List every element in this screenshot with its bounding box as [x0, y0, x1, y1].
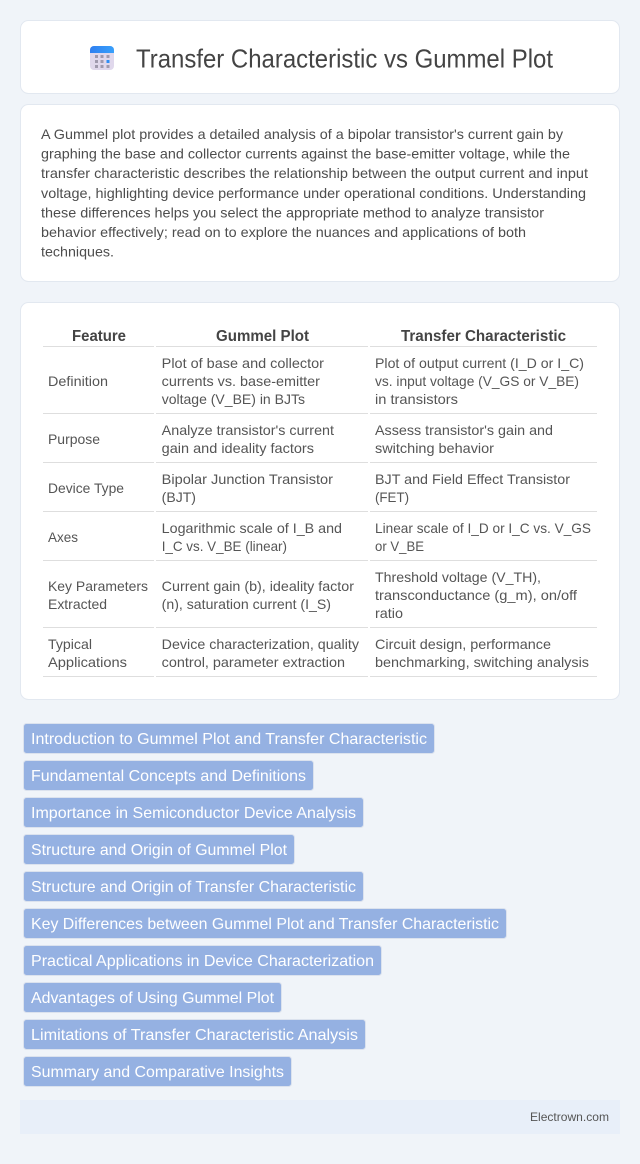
table row: key parameters extracted: Key Parameters: [48, 578, 148, 594]
table row: purpose: Analyze transistor's current: [162, 422, 334, 438]
table row: axes: [48, 520, 591, 554]
table row: typical applications: Applications: [48, 654, 127, 670]
table row: axes: Logarithmic scale of I_B and: [162, 520, 342, 536]
table row: definition: voltage (V_BE) in BJTs: [162, 391, 305, 407]
pill: limitations: Limitations of Transfer Characteristic Analysis: [31, 1027, 358, 1044]
table row: key parameters extracted: Extracted: [48, 596, 107, 612]
table row: axes: or V_BE: [375, 538, 424, 554]
table row: purpose: gain and ideality factors: [162, 440, 314, 456]
table row: purpose: [48, 422, 553, 456]
pill: introduction: Introduction to Gummel Plot and Transfer Characteristic: [31, 731, 427, 748]
table row: typical applications: Typical: [48, 636, 92, 652]
panel: title header: [20, 20, 620, 94]
text block: intro paragraph: these differences helps you select the appropriate method to analyze transistor: [41, 204, 544, 220]
pill: limitations: [24, 1020, 366, 1050]
pill: fundamental concepts: Fundamental Concepts and Definitions: [31, 768, 306, 785]
panel: comparison table: [20, 302, 620, 700]
table row: device type: [48, 471, 570, 505]
pill: practical applications: Practical Applications in Device Characterization: [31, 953, 374, 970]
pill: transfer structure: Structure and Origin of Transfer Characteristic: [31, 879, 356, 896]
pill: key differences: Key Differences between Gummel Plot and Transfer Characteristic: [31, 916, 499, 933]
table row: axes: Linear scale of I_D or I_C vs. V_GS: [375, 520, 591, 536]
table row: typical applications: Device characterization, quality: [162, 636, 359, 652]
text block: intro paragraph: behavior effectively; read on to explore the nuances and applications of both: [41, 224, 526, 240]
table row: definition: Plot of output current (I_D or I_C): [375, 355, 584, 371]
text block: intro paragraph: voltage, highlighting device performance under operational conditions. Understanding: [41, 185, 586, 201]
pill: advantages: Advantages of Using Gummel Plot: [31, 990, 275, 1007]
footer: Electrown.com: [530, 1110, 609, 1124]
pill: gummel structure: [24, 834, 294, 864]
table row: key parameters extracted: Threshold voltage (V_TH),: [375, 569, 541, 585]
table row: device type: BJT and Field Effect Transistor: [375, 471, 570, 487]
table row: key parameters extracted: ratio: [375, 605, 403, 621]
table row: typical applications: [48, 636, 589, 670]
table row: typical applications: benchmarking, switching analysis: [375, 654, 589, 670]
text block: intro paragraph: [41, 126, 588, 260]
pill: gummel structure: Structure and Origin of Gummel Plot: [31, 842, 288, 859]
icon: calendar: [90, 46, 114, 70]
table row: key parameters extracted: (n), saturation current (I_S): [162, 596, 331, 612]
table row: device type: Device Type: [48, 480, 124, 496]
table row: device type: (FET): [375, 489, 409, 505]
table row: axes: I_C vs. V_BE (linear): [162, 538, 287, 554]
pill: key differences: [24, 908, 506, 938]
pill: importance: Importance in Semiconductor Device Analysis: [31, 805, 356, 822]
pill: introduction: [24, 724, 434, 754]
pill: fundamental concepts: [24, 760, 314, 790]
panel: introduction: [20, 104, 620, 282]
table header: Feature: [72, 328, 126, 345]
table row: key parameters extracted: [48, 569, 577, 621]
table row: purpose: switching behavior: [375, 440, 494, 456]
text block: intro paragraph: graphing the base and collector currents against the base-emitter voltage, while the: [41, 146, 570, 162]
text block: intro paragraph: A Gummel plot provides a detailed analysis of a bipolar transistor's current gain by: [41, 126, 563, 142]
table header: [72, 328, 566, 345]
table row: definition: in transistors: [375, 391, 458, 407]
table row: definition: vs. input voltage (V_GS or V_BE): [375, 373, 579, 389]
table row: purpose: Assess transistor's gain and: [375, 422, 553, 438]
table header: Transfer Characteristic: [401, 328, 566, 345]
pill: summary: Summary and Comparative Insights: [31, 1064, 284, 1081]
table row: definition: [48, 355, 584, 407]
text block: intro paragraph: transfer characteristic describes the relationship between the output current and input: [41, 165, 588, 181]
pill: transfer structure: [24, 872, 364, 902]
text block: intro paragraph: techniques.: [41, 244, 114, 260]
pill: importance: [24, 798, 364, 828]
table row: axes: Axes: [48, 529, 78, 545]
table row: typical applications: Circuit design, performance: [375, 636, 551, 652]
table row: key parameters extracted: transconductance (g_m), on/off: [375, 587, 577, 603]
table row: purpose: Purpose: [48, 431, 100, 447]
table row: device type: (BJT): [162, 489, 196, 505]
list: section links: [24, 724, 506, 1086]
table row: typical applications: control, parameter extraction: [162, 654, 345, 670]
table row: key parameters extracted: Current gain (b), ideality factor: [162, 578, 354, 594]
table row: definition: Definition: [48, 373, 108, 389]
footer: [20, 1100, 620, 1134]
pill: advantages: [24, 982, 282, 1012]
pill: summary: [24, 1056, 292, 1086]
table row: definition: currents vs. base-emitter: [162, 373, 320, 389]
pill: practical applications: [24, 946, 382, 976]
table row: device type: Bipolar Junction Transistor: [162, 471, 333, 487]
table row: definition: Plot of base and collector: [162, 355, 324, 371]
title: Transfer Characteristic vs Gummel Plot: [136, 44, 554, 74]
table header: Gummel Plot: [216, 328, 310, 345]
